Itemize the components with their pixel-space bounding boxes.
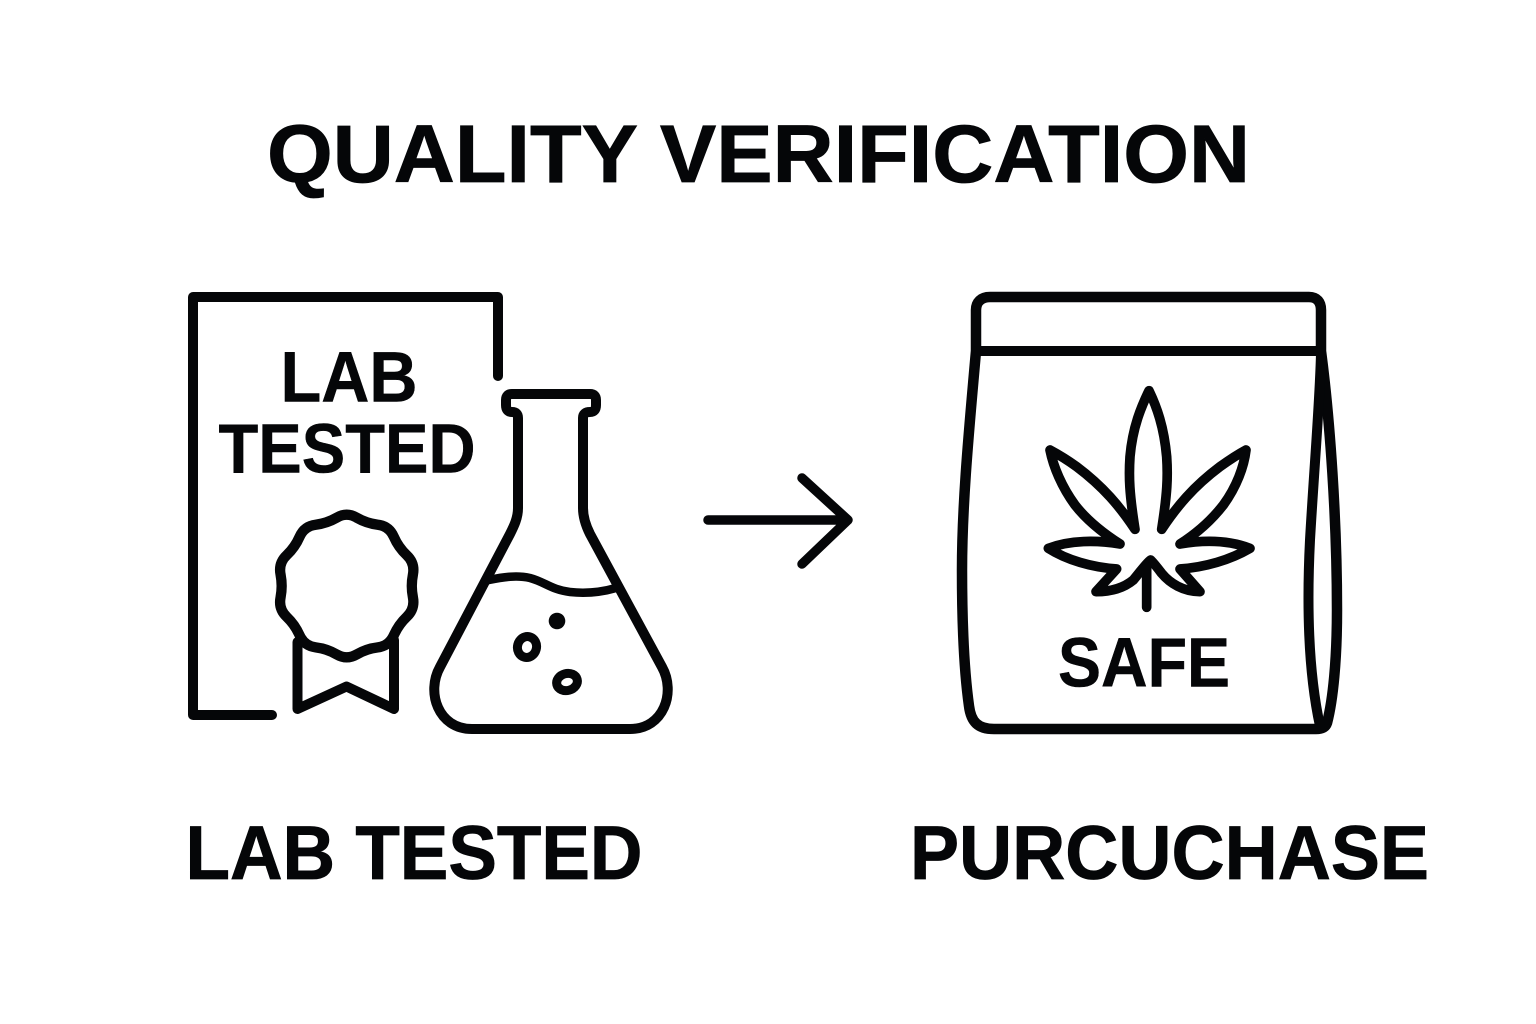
leaf stem <box>1132 567 1161 607</box>
icon: cannabis leaf <box>1048 391 1250 607</box>
title: QUALITY VERIFICATION <box>267 109 1250 200</box>
ribbon <box>298 640 394 709</box>
certificate outline <box>193 297 498 715</box>
arrow <box>708 478 848 564</box>
bag outline <box>962 297 1337 729</box>
bubbles <box>515 613 579 693</box>
flask outline <box>434 394 668 729</box>
bag side gusset <box>1308 353 1321 726</box>
icon: lab certificate <box>193 297 498 715</box>
label: purchase: PURCUCHASE <box>910 811 1429 896</box>
certificate text: TESTED <box>218 410 476 488</box>
certificate text: LAB <box>280 338 418 418</box>
rosette seal <box>280 515 413 657</box>
leaf outline <box>1048 391 1250 592</box>
label: lab tested: LAB TESTED <box>186 811 642 896</box>
liquid surface <box>489 577 616 593</box>
certificate text <box>218 338 476 488</box>
icon: flask <box>434 394 668 729</box>
bag seal line <box>976 346 1321 356</box>
bag label: SAFE <box>1058 624 1230 702</box>
icon: safe bag <box>962 297 1337 729</box>
